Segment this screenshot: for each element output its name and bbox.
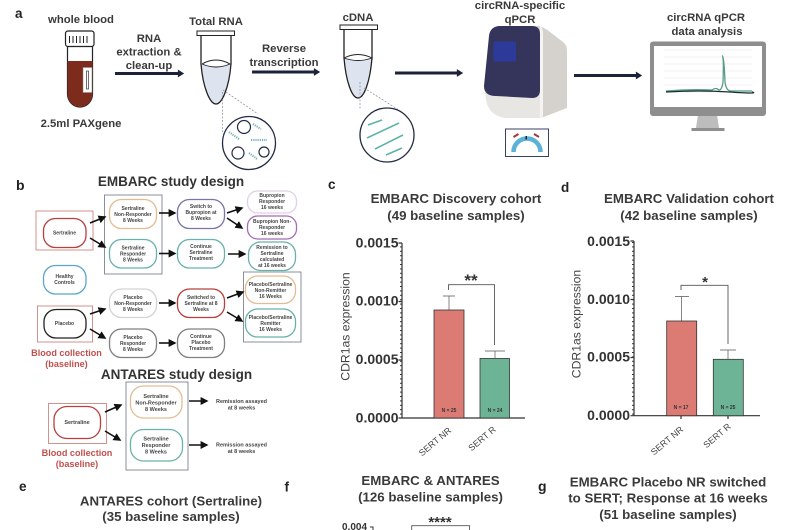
pill: Switched to Sertraline: Sertraline at 8 [184, 301, 218, 307]
pill: Placebo/Sertraline Remitter: 16 Weeks [259, 327, 282, 333]
pill: Switched to Sertraline: Weeks [193, 307, 209, 313]
x labels c [417, 424, 498, 458]
pill: Healthy Controls [44, 266, 86, 294]
bar: SERT NR c [434, 296, 464, 418]
pill: Continue Placebo: Treatment [189, 346, 213, 352]
icon: qPCR machine [484, 26, 567, 118]
panel a: qPCR workflow: extraction & [116, 46, 182, 58]
pill: Switch to Bupropion [178, 200, 224, 228]
grey responder box [104, 195, 162, 274]
whole blood heading: whole blood [47, 14, 114, 26]
significance f [342, 514, 470, 530]
flow arrows [90, 208, 245, 343]
pill: Bupropion Non-Responder: 16 weeks [261, 231, 283, 237]
pill: Placebo Non-Responder: 8 Weeks [123, 307, 143, 313]
y tick labels c: 0.0010 [356, 293, 399, 309]
pill: Continue Placebo: Placebo [191, 340, 211, 346]
pill: Placebo Non-Responder: Non-Responder [114, 301, 152, 307]
panel b: study designs [16, 174, 301, 470]
pill: Sertraline Non-Responder: Sertraline [121, 206, 145, 212]
pill: Bupropion Non-Responder: Bupropion Non- [253, 219, 291, 225]
pill: Antares Responder [130, 430, 182, 461]
pill: Bupropion Non-Responder: Responder [259, 225, 285, 231]
placebo red collection box [38, 306, 92, 342]
remission text upper: Remission assayed [216, 399, 267, 405]
EMBARC heading: EMBARC study design [98, 174, 244, 189]
pill: Continue Sertraline [178, 240, 224, 268]
pill: Remission to Sertraline: at 16 weeks [258, 263, 286, 269]
icon: RNA circle detail [222, 116, 276, 170]
pill: Antares Responder: Sertraline [143, 436, 169, 442]
significance bracket c [448, 271, 494, 345]
label e: e [19, 479, 27, 494]
arrow: reverse transcription [252, 70, 317, 74]
remission text lower: at 8 weeks [228, 449, 255, 455]
analysis heading: circRNA qPCR [667, 12, 745, 24]
remission text upper [216, 399, 267, 412]
pill: Antares Sertraline: Sertraline [64, 420, 90, 426]
panel c: discovery chart: (49 baseline samples) [387, 208, 525, 223]
significance bracket c: ** [464, 271, 478, 290]
antares grey box [126, 382, 188, 470]
title g: EMBARC Placebo NR switched [570, 474, 766, 490]
pill: Healthy Controls: Healthy [55, 274, 74, 280]
pill: Placebo/Sertraline Remitter: Placebo/Sertraline [249, 315, 293, 321]
label g: g [538, 478, 547, 494]
antares red collection box [48, 404, 106, 444]
label c: c [328, 177, 336, 192]
pill: Antares Non-Responder: Sertraline [143, 394, 169, 400]
RNA extraction label: RNA [137, 33, 161, 45]
pill: Placebo Non-Responder: Placebo [123, 295, 143, 301]
x labels c: SERT R [466, 424, 498, 453]
pill: Placebo Responder: Responder [120, 341, 146, 347]
pill: Continue Placebo: Continue [190, 334, 212, 340]
bar: SERT NR d [667, 296, 697, 416]
y tick labels c: 0.0000 [356, 409, 399, 425]
significance bracket d [681, 274, 728, 344]
x labels d: SERT R [701, 421, 733, 450]
y tick labels d: 0.0015 [587, 233, 630, 249]
pill: Continue Sertraline: Treatment [189, 256, 213, 262]
panel b: study designs: (baseline) [45, 359, 88, 369]
bar: SERT R c [480, 351, 510, 418]
pill: Placebo/Sertraline Non-Remitter: Non-Remitter [255, 288, 286, 294]
pill: Placebo/Sertraline Remitter [246, 309, 296, 337]
pill: Remission to Sertraline: Remission to [256, 245, 288, 251]
pill: Sertraline Responder: Sertraline [121, 246, 145, 252]
pill: Antares Non-Responder: 8 Weeks [145, 407, 167, 413]
panel a: qPCR workflow: clean-up [126, 60, 172, 72]
x labels d: SERT NR [649, 424, 686, 457]
panel e heading: (35 baseline samples) [102, 509, 240, 524]
bar: SERT R d: N = 25 [721, 405, 736, 411]
pill: Antares Non-Responder [130, 386, 182, 418]
title f: EMBARC & ANTARES [361, 473, 500, 488]
pill: Placebo/Sertraline Non-Remitter [246, 276, 296, 304]
panel b: study designs: (baseline) [56, 459, 98, 469]
pill: Placebo Responder: 8 Weeks [123, 347, 143, 353]
pill: Sertraline Non-Responder [110, 200, 156, 228]
pill: Placebo/Sertraline Non-Remitter: 16 Weeks [259, 294, 282, 300]
panel f heading [284, 473, 503, 530]
y tick labels c [356, 234, 399, 425]
pill: Antares Responder: 8 Weeks [145, 450, 167, 456]
zoom guide lines [222, 90, 258, 132]
y tick labels d: 0.0010 [587, 291, 630, 307]
pill: Sertraline Responder: Responder [120, 252, 146, 258]
pill: Remission to Sertraline [248, 242, 296, 270]
panel d: validation chart: (42 baseline samples) [620, 208, 758, 223]
panel g heading: to SERT; Response at 16 weeks [568, 491, 768, 506]
y tick labels d: 0.0005 [587, 349, 630, 365]
icon: total RNA tube [197, 31, 234, 104]
remission text lower [216, 442, 267, 455]
icon: cDNA circle detail [360, 108, 414, 162]
pill: Sertraline [44, 218, 86, 248]
arrow: extraction [115, 72, 181, 75]
bar: SERT NR d: N = 17 [674, 405, 689, 411]
pill: Remission to Sertraline: Sertraline [260, 251, 284, 257]
title e: ANTARES cohort (Sertraline) [80, 494, 262, 508]
pill: Healthy Controls: Controls [54, 280, 75, 286]
reverse transcription label: Reverse [262, 43, 306, 55]
pill: Sertraline Non-Responder: Non-Responder [114, 212, 152, 218]
panel g heading: (51 baseline samples) [599, 507, 737, 522]
pill: Placebo Responder: Placebo [123, 335, 143, 341]
panel g heading [538, 474, 768, 522]
pill: Placebo/Sertraline Remitter: Remitter [260, 321, 281, 327]
remission text upper: at 8 weeks [228, 406, 255, 412]
pill: Sertraline Responder: 8 Weeks [123, 258, 143, 264]
x labels c: SERT NR [417, 425, 454, 458]
tube volume label: 2.5ml PAXgene [41, 118, 121, 130]
label f: f [284, 480, 290, 494]
chart title c: EMBARC Discovery cohort [371, 191, 542, 206]
pill: Antares Sertraline [54, 406, 100, 438]
zoom guide lines [360, 82, 402, 112]
y axis title d: CDR1as expression [570, 270, 584, 378]
panel f heading: (126 baseline samples) [358, 490, 503, 504]
pill: Placebo Non-Responder [110, 289, 156, 318]
panel a: qPCR workflow [15, 0, 766, 170]
pill: Bupropion Responder: 16 weeks [261, 205, 283, 211]
label a: a [15, 6, 23, 21]
axes c [398, 243, 525, 418]
y tick labels c: 0.0015 [356, 234, 399, 250]
panel a: qPCR workflow: data analysis [672, 26, 742, 38]
remission text lower: Remission assayed [216, 442, 267, 448]
cDNA heading: cDNA [343, 12, 373, 24]
significance bracket d: * [702, 274, 708, 291]
x labels d [649, 421, 733, 457]
icon: blood tube [66, 31, 94, 107]
blood collection label: Blood collection [31, 348, 102, 358]
pill: Switched to Sertraline [178, 289, 224, 318]
pill: Remission to Sertraline: calculated [260, 257, 284, 263]
y tick labels d [587, 233, 630, 423]
axes d [630, 241, 760, 419]
grey remitter box [244, 272, 301, 342]
panel c: discovery chart [328, 177, 542, 458]
bar: SERT NR c: N = 25 [442, 408, 457, 414]
pill: Continue Placebo [178, 329, 224, 358]
pill: Placebo/Sertraline Non-Remitter: Placebo/Sertraline [249, 282, 293, 288]
pill: Sertraline Responder [110, 240, 156, 268]
pill: Antares Non-Responder: Non-Responder [135, 400, 177, 406]
ANTARES heading: ANTARES study design [101, 367, 252, 382]
pill: Bupropion Responder [248, 191, 296, 213]
icon: monitor with chart [650, 42, 766, 131]
panel a: qPCR workflow: qPCR [505, 14, 535, 26]
pill: Placebo [44, 310, 86, 338]
antares arrows [105, 401, 207, 445]
pill: Continue Sertraline: Sertraline [189, 250, 213, 256]
pill: Continue Sertraline: Continue [190, 244, 212, 250]
sertraline red collection box [36, 211, 93, 250]
pill: Switch to Bupropion: Switch to [190, 204, 212, 210]
panel d: validation chart [561, 180, 775, 457]
panel e heading [19, 479, 262, 524]
arrow: to qPCR [395, 72, 460, 74]
icon: cDNA tube [340, 25, 378, 98]
pill: Bupropion Responder: Bupropion [259, 193, 285, 199]
qPCR heading: circRNA-specific [475, 0, 565, 12]
blood collection label antares: Blood collection [42, 448, 112, 458]
y tick labels c: 0.0005 [356, 351, 399, 367]
y tick labels d: 0.0000 [587, 407, 630, 423]
label d: d [561, 180, 569, 195]
pill: Switch to Bupropion: 8 Weeks [191, 216, 211, 222]
pill: Placebo: Placebo [55, 321, 74, 327]
arrow: to analysis [574, 74, 639, 77]
pill: Antares Responder: Responder [142, 443, 171, 449]
icon: PCR thermal arc [506, 129, 548, 156]
y axis title c: CDR1as expression [338, 272, 352, 381]
pill: Sertraline: Sertraline [53, 230, 76, 236]
pill: Switched to Sertraline: Switched to [187, 295, 215, 301]
pill: Placebo Responder [110, 329, 156, 358]
label b: b [16, 177, 25, 193]
pill: Switch to Bupropion: Bupropion at [185, 210, 217, 216]
pill: Bupropion Responder: Responder [259, 199, 285, 205]
bar: SERT R c: N = 24 [488, 408, 503, 414]
Total RNA heading: Total RNA [189, 16, 243, 28]
pill: Bupropion Non-Responder [248, 216, 296, 239]
panel a: qPCR workflow: transcription [249, 57, 319, 69]
bar: SERT R d [713, 350, 743, 416]
chart title d: EMBARC Validation cohort [604, 191, 775, 206]
pill: Sertraline Non-Responder: 8 Weeks [123, 218, 143, 224]
